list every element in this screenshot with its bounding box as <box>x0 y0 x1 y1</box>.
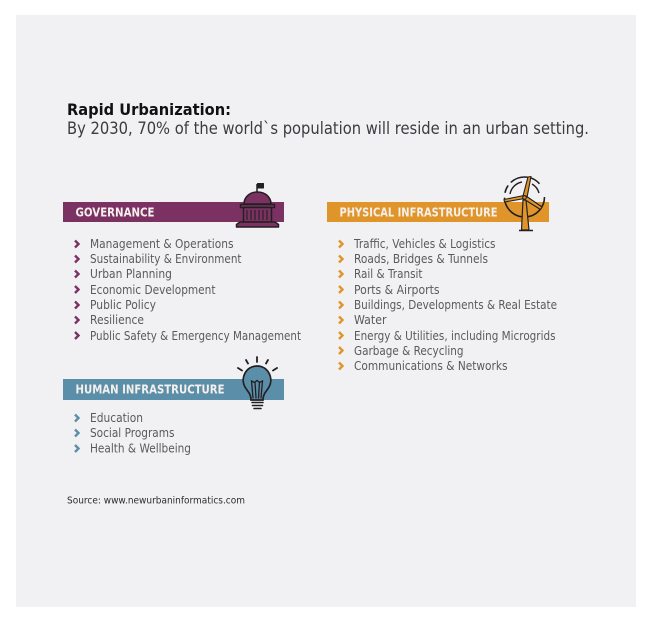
governance list: Economic Development <box>90 283 216 297</box>
human infrastructure list <box>75 411 191 456</box>
physical infrastructure list: Water <box>354 313 387 327</box>
physical infrastructure list: Roads, Bridges & Tunnels <box>354 252 488 266</box>
governance list: Public Safety & Emergency Management <box>90 329 301 343</box>
source note: Source: www.newurbaninformatics.com <box>67 496 245 506</box>
physical infrastructure list: Communications & Networks <box>354 359 508 373</box>
title: Rapid Urbanization: <box>67 100 231 119</box>
physical infrastructure heading: PHYSICAL INFRASTRUCTURE <box>340 204 498 220</box>
physical infrastructure list: Ports & Airports <box>354 283 440 297</box>
governance heading: GOVERNANCE <box>76 204 154 220</box>
governance list: Resilience <box>90 313 144 327</box>
physical infrastructure list: Energy & Utilities, including Microgrids <box>354 329 556 343</box>
governance list: Sustainability & Environment <box>90 252 242 266</box>
human infrastructure header bar <box>63 379 284 400</box>
physical infrastructure list: Traffic, Vehicles & Logistics <box>353 237 496 251</box>
human infrastructure list: Education <box>90 411 143 425</box>
human infrastructure list: Social Programs <box>90 426 174 440</box>
governance header bar <box>63 202 284 222</box>
physical infrastructure list: Rail & Transit <box>354 267 423 281</box>
human infrastructure heading: HUMAN INFRASTRUCTURE <box>76 382 224 396</box>
icon: wind turbine <box>504 176 544 230</box>
icon: light bulb <box>238 357 277 408</box>
panel: governance <box>63 184 301 343</box>
human infrastructure list: Health & Wellbeing <box>90 442 191 456</box>
panel: physical infrastructure <box>327 176 557 373</box>
title <box>67 100 589 138</box>
physical infrastructure header bar <box>327 202 549 222</box>
governance list: Urban Planning <box>90 267 172 281</box>
icon: capitol building <box>236 184 278 227</box>
title: By 2030, 70% of the world`s population will reside in an urban setting. <box>67 119 589 138</box>
governance list: Public Policy <box>90 298 156 312</box>
physical infrastructure list <box>339 237 557 373</box>
governance list: Management & Operations <box>90 237 234 251</box>
physical infrastructure list: Garbage & Recycling <box>354 344 464 358</box>
physical infrastructure list: Buildings, Developments & Real Estate <box>354 298 557 312</box>
panel: human infrastructure <box>63 357 284 456</box>
governance list <box>75 237 301 343</box>
